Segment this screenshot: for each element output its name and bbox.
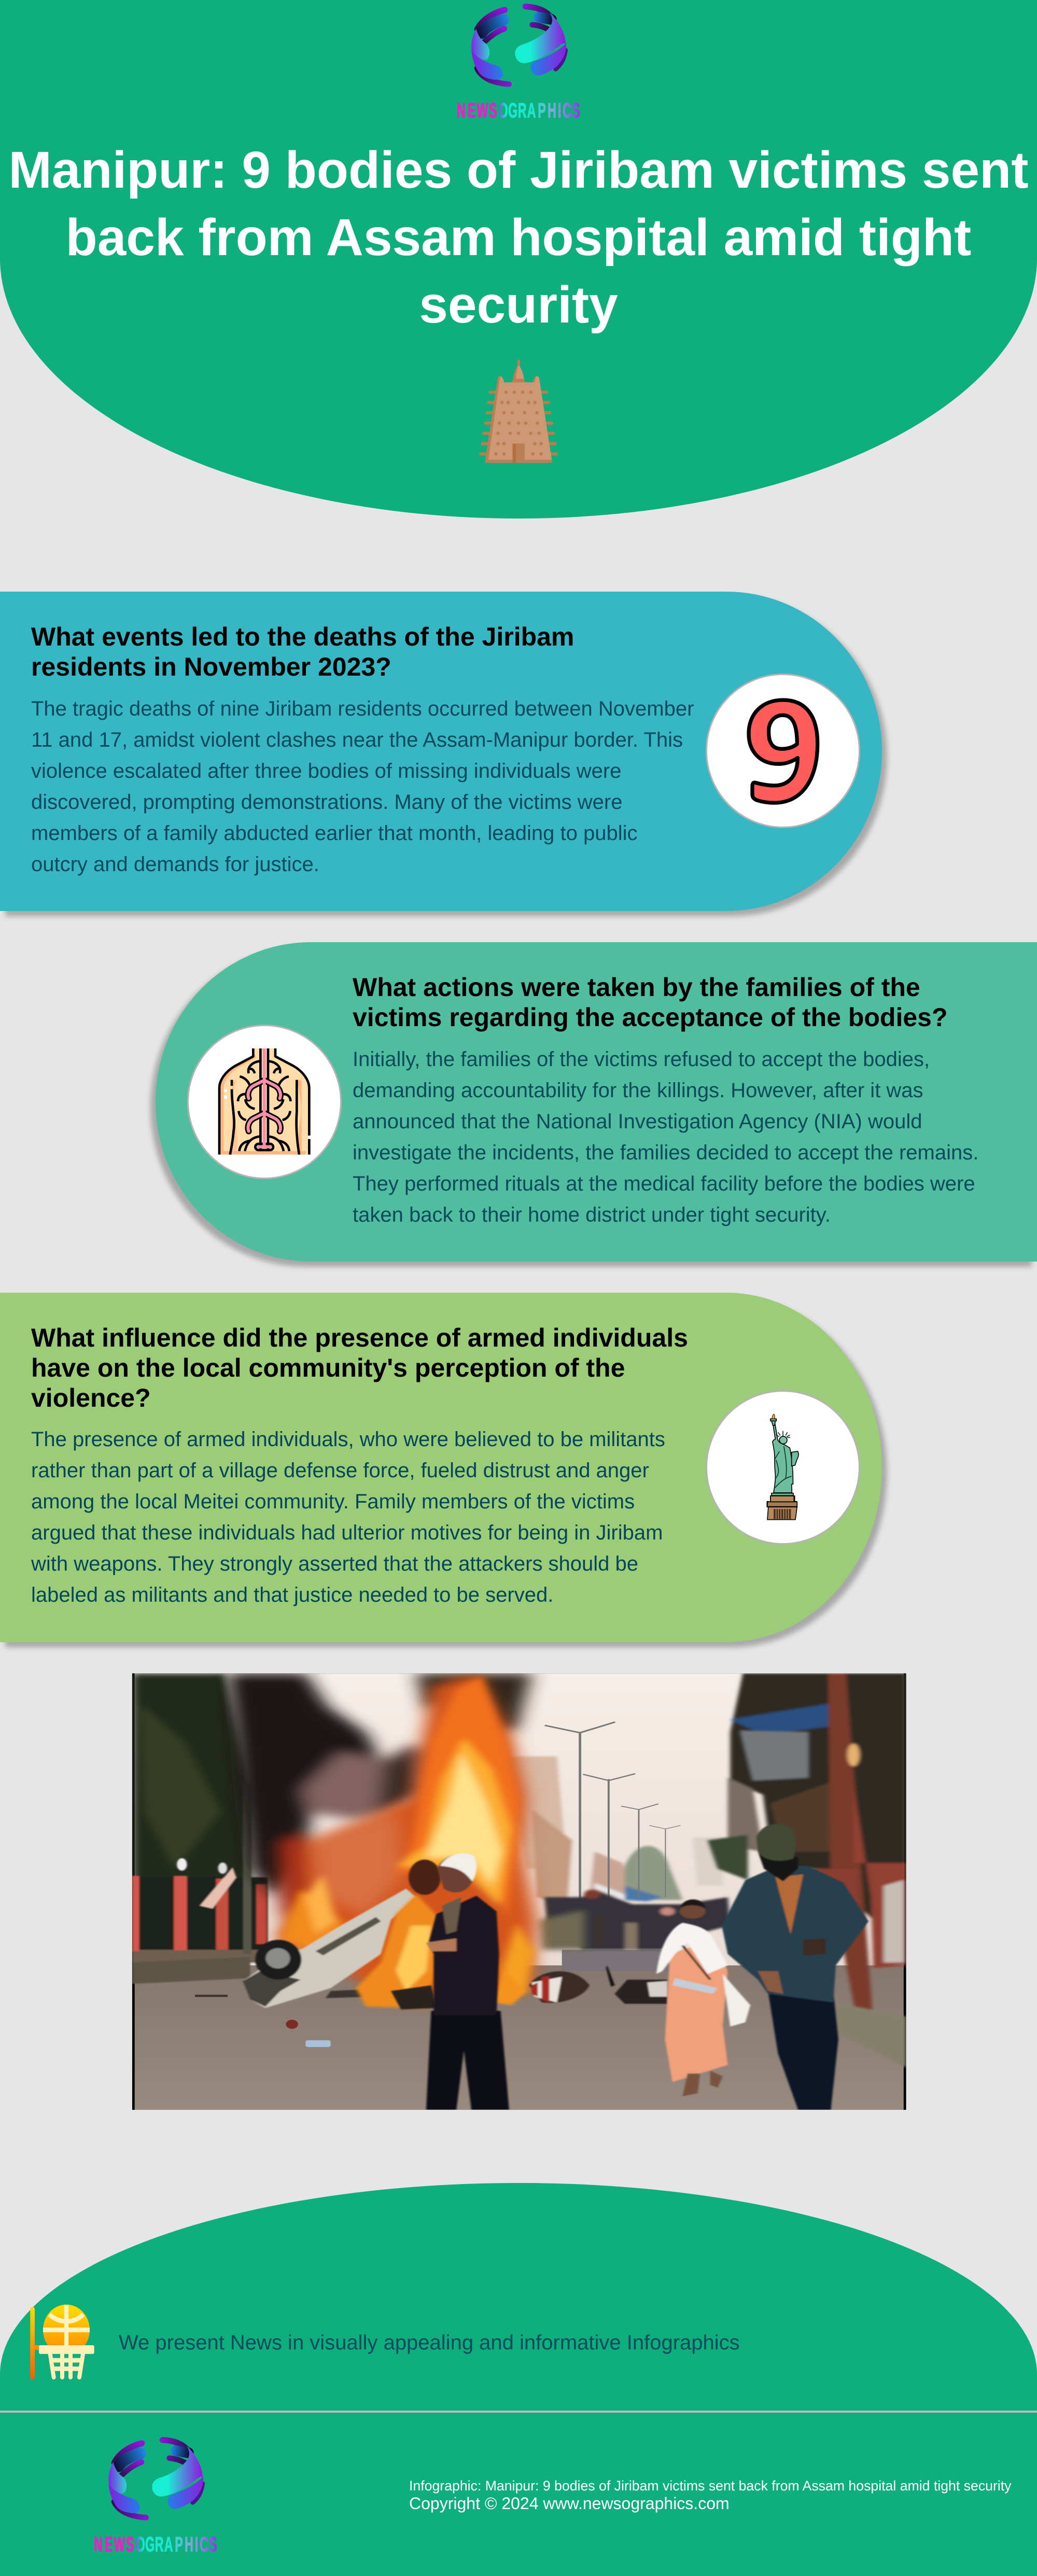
body text: [353, 1048, 978, 1226]
crowd: [544, 1890, 730, 1950]
body text: [31, 1428, 665, 1606]
body text: labeled as militants and that justice needed to be served.: [31, 1584, 553, 1606]
body text: outcry and demands for justice.: [31, 853, 319, 876]
title: back from Assam hospital amid tight: [66, 208, 971, 267]
background buildings: [507, 1756, 723, 1906]
body text: The presence of armed individuals, who were believed to be militants: [31, 1428, 665, 1451]
body text: [31, 697, 694, 876]
title: [8, 141, 1029, 334]
icon: human spine and nerves: [187, 1025, 342, 1179]
body text: with weapons. They strongly asserted that the attackers should be: [31, 1552, 638, 1575]
icon: statue of liberty in circle: [706, 1390, 860, 1544]
body text: announced that the National Investigation Agency (NIA) would: [353, 1110, 922, 1133]
body text: 11 and 17, amidst violent clashes near the Assam-Manipur border. This: [31, 729, 683, 751]
body text: They performed rituals at the medical facility before the bodies were: [353, 1172, 975, 1195]
panel: influence of armed individuals: [0, 1292, 882, 1642]
debris: [195, 1995, 331, 2047]
heading: [31, 622, 574, 681]
heading: What influence did the presence of armed individuals: [31, 1323, 688, 1352]
panel: actions by the families: [156, 942, 1037, 1262]
fire in front of car: [356, 1894, 527, 2008]
body text: among the local Meitei community. Family members of the victims: [31, 1490, 635, 1513]
overturned car: [243, 1859, 441, 2008]
infographic caption: Infographic: Manipur: 9 bodies of Jiribam victims sent back from Assam hospital amid tight security: [409, 2478, 1012, 2494]
logo: newsographics: [457, 4, 580, 122]
pavement and fence: [132, 1783, 268, 1984]
body text: violence escalated after three bodies of missing individuals were: [31, 760, 621, 782]
body text: rather than part of a village defense force, fueled distrust and anger: [31, 1459, 649, 1482]
street lamps: [545, 1722, 680, 1906]
body text: argued that these individuals had ulterior motives for being in Jiribam: [31, 1521, 663, 1544]
heading: [31, 1323, 688, 1412]
heading: What actions were taken by the families of the: [353, 973, 920, 1002]
icon: number nine in circle: [706, 674, 860, 828]
photo: burning car and people fleeing on street: [132, 1673, 906, 2110]
logo: newsographics: NEWSOGRAPHICS: [457, 99, 580, 122]
panel: events leading to the deaths: [0, 592, 882, 911]
heading: residents in November 2023?: [31, 652, 391, 681]
heading: [353, 973, 948, 1032]
heading: violence?: [31, 1383, 151, 1412]
footer credit text: [409, 2478, 1012, 2513]
title: Manipur: 9 bodies of Jiribam victims sent: [8, 141, 1029, 199]
body text: demanding accountability for the killings. However, after it was: [353, 1079, 923, 1102]
header banner: [0, 0, 1037, 519]
tagline: We present News in visually appealing and informative Infographics: [119, 2331, 740, 2354]
footer banner: [0, 2183, 1037, 2576]
man in dark jacket: [722, 1824, 868, 2110]
heading: What events led to the deaths of the Jiribam: [31, 622, 574, 651]
logo: newsographics footer: [94, 2437, 217, 2556]
road: [135, 1950, 904, 2110]
woman in peach dress: [656, 1899, 750, 2096]
icon: mud brick mosque tower: [479, 359, 558, 463]
body text: Initially, the families of the victims refused to accept the bodies,: [353, 1048, 930, 1071]
body text: The tragic deaths of nine Jiribam residents occurred between November: [31, 697, 694, 720]
motorcycles: [391, 1965, 667, 2009]
icon: basketball hoop: [30, 2304, 94, 2379]
smoke: [228, 1673, 532, 1897]
body text: members of a family abducted earlier that month, leading to public: [31, 822, 638, 845]
right dark trees and building: [708, 1673, 906, 2068]
logo: newsographics footer: NEWSOGRAPHICS: [94, 2532, 217, 2556]
heading: have on the local community's perception of the: [31, 1353, 625, 1382]
title: security: [419, 276, 618, 334]
fire: [275, 1673, 537, 2005]
body text: investigate the incidents, the families decided to accept the remains.: [353, 1141, 978, 1164]
heading: victims regarding the acceptance of the bodies?: [353, 1003, 948, 1032]
man in white cap: [426, 1853, 509, 2110]
body text: discovered, prompting demonstrations. Many of the victims were: [31, 791, 622, 814]
body text: taken back to their home district under tight security.: [353, 1203, 831, 1226]
copyright: Copyright © 2024 www.newsographics.com: [409, 2494, 730, 2513]
left trees: [132, 1673, 250, 1886]
divider line: [0, 2411, 1037, 2413]
